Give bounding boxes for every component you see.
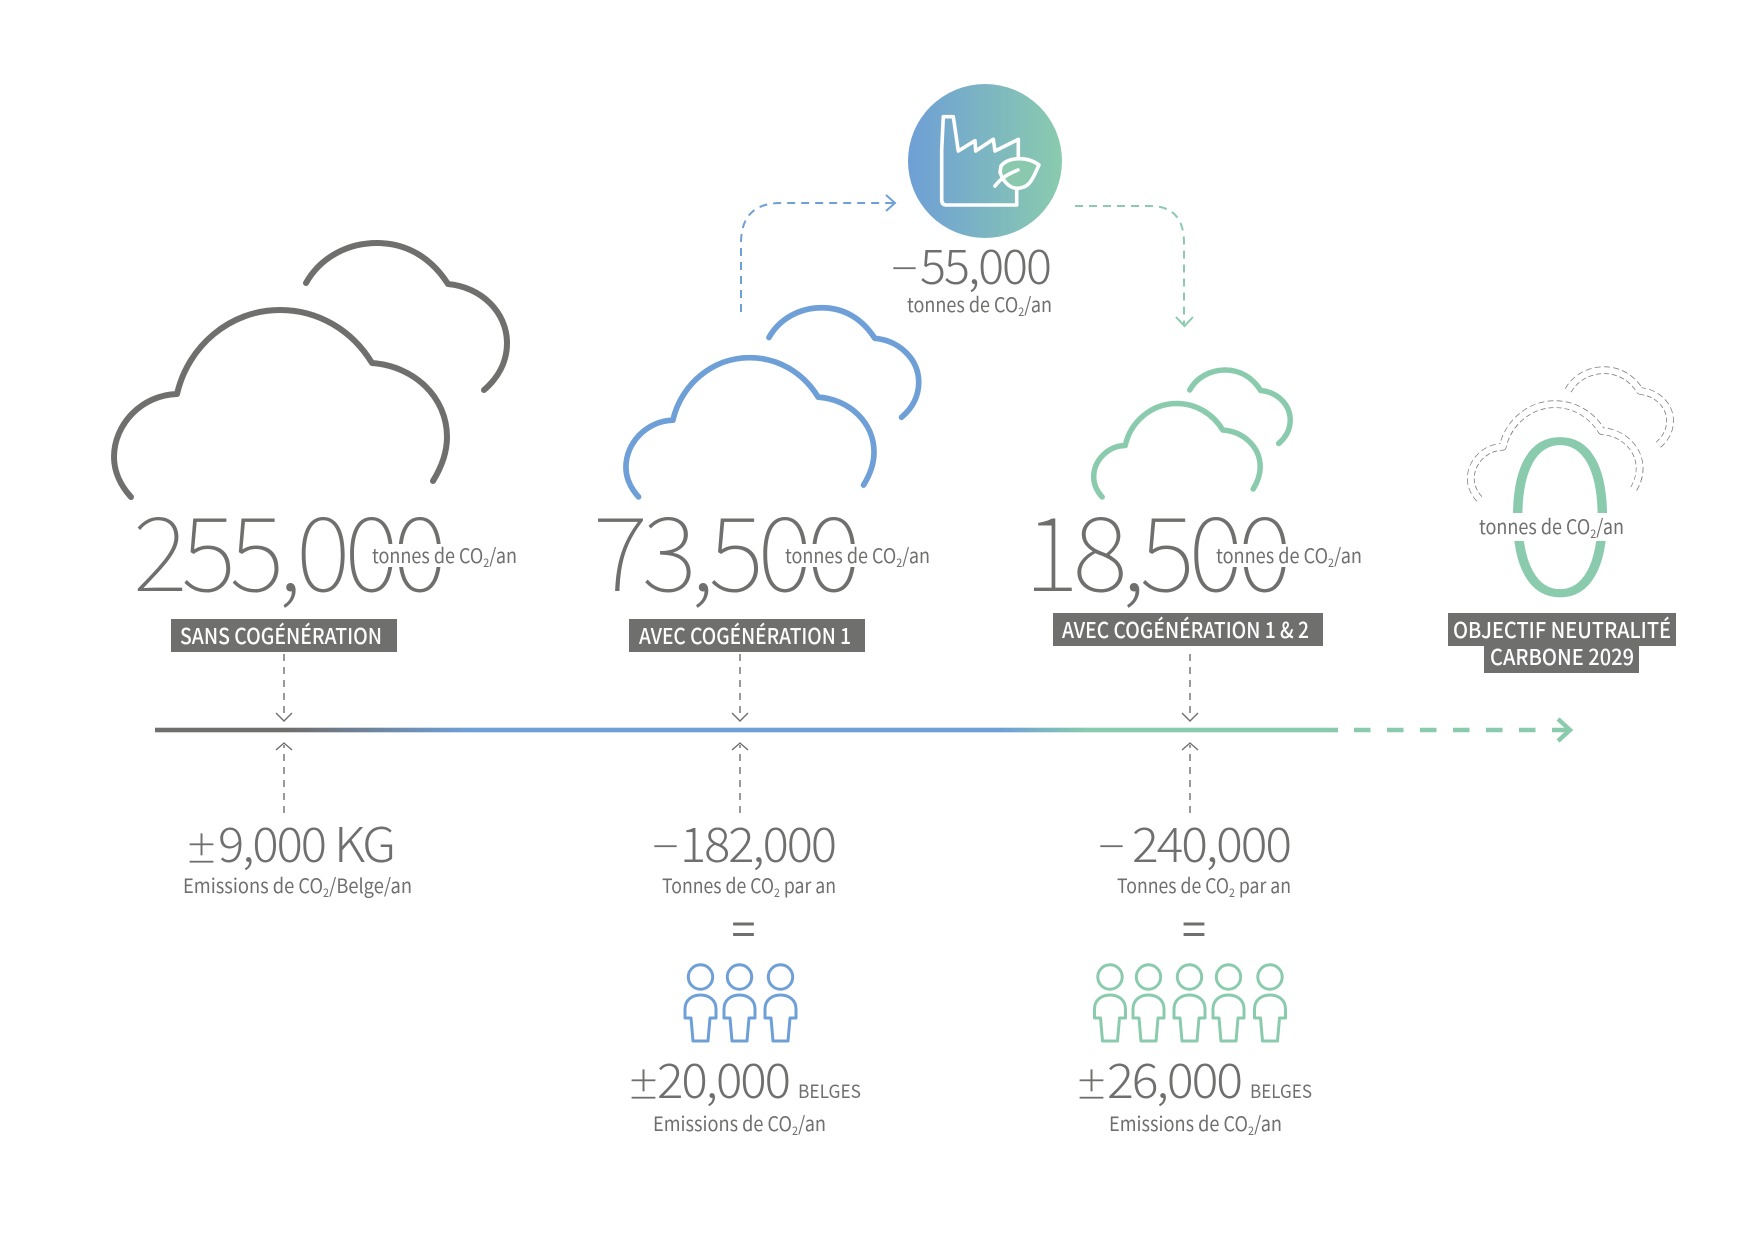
unit knock-out background bbox=[783, 544, 863, 567]
label: sans cogénération: SANS COGÉNÉRATION bbox=[180, 619, 382, 651]
value unit: KG bbox=[334, 806, 394, 876]
panel: sans cogénération bbox=[114, 243, 517, 652]
label: objectif neutralité carbone 2029: OBJECTIF NEUTRALITÉ bbox=[1453, 613, 1671, 645]
unit: tonnes de CO2/an: /an bbox=[902, 540, 930, 569]
unit: tonnes de CO2/an: 2 bbox=[1590, 525, 1597, 542]
equals: = bbox=[1182, 905, 1206, 952]
panel: avec cogénération 1 bbox=[593, 308, 930, 652]
label: avec cogénération 1: AVEC COGÉNÉRATION 1 bbox=[639, 619, 851, 651]
stat: -240,000 bbox=[1077, 806, 1312, 1139]
caption: 2 bbox=[1229, 884, 1235, 901]
unit: tonnes de CO2/an: /an bbox=[489, 540, 517, 569]
value minus: − bbox=[651, 818, 680, 876]
caption: Emissions de CO bbox=[1109, 1108, 1262, 1137]
unit: tonnes de CO2/an: /an bbox=[1596, 511, 1624, 540]
caption: 2 bbox=[1248, 1122, 1254, 1139]
value digits: 182,000 bbox=[680, 806, 835, 876]
caption: /Belge/an bbox=[329, 870, 412, 899]
timeline bbox=[155, 719, 1570, 741]
value minus: − bbox=[1097, 818, 1126, 876]
unit knock-out background bbox=[1476, 513, 1626, 541]
panel: avec cogénération 1 et 2 bbox=[1024, 370, 1362, 646]
caption: par an bbox=[780, 870, 836, 899]
caption: Tonnes de CO bbox=[662, 870, 789, 899]
label: objectif neutralité carbone 2029: CARBONE 2029 bbox=[1490, 640, 1634, 672]
label: avec cogénération 1 & 2: AVEC COGÉNÉRATION 1 & 2 bbox=[1062, 613, 1309, 645]
value: ± sign: ± bbox=[187, 818, 216, 876]
equals: = bbox=[731, 905, 756, 952]
value digits: 9,000 bbox=[218, 806, 325, 876]
caption: /an bbox=[798, 1108, 826, 1137]
stat: -182,000 bbox=[629, 806, 861, 1139]
caption: Emissions de CO bbox=[653, 1108, 806, 1137]
unit: tonnes de CO2/an: tonnes de CO bbox=[1216, 540, 1340, 569]
icon: gray clouds bbox=[114, 243, 507, 497]
caption: 2 bbox=[774, 884, 780, 901]
unit: tonnes de CO2/an: /an bbox=[1334, 540, 1362, 569]
icon: blue clouds bbox=[626, 308, 919, 497]
value: 73,500: 73,500 bbox=[593, 472, 855, 621]
timeline dashed arrow bbox=[1354, 719, 1570, 741]
value digits: 240,000 bbox=[1132, 806, 1290, 876]
caption: 2 bbox=[323, 884, 329, 901]
belges: BELGES bbox=[798, 1078, 861, 1104]
label: objectif neutralité carbone 2029 bbox=[1448, 613, 1676, 673]
caption: Emissions de CO bbox=[183, 870, 336, 899]
icon: factory circle bbox=[908, 84, 1062, 238]
caption: Tonnes de CO bbox=[1117, 870, 1244, 899]
unit: tonnes de CO2/an: 2 bbox=[483, 554, 490, 571]
belges: BELGES bbox=[1250, 1078, 1312, 1104]
unit: tonnes de CO2/an: tonnes de CO bbox=[1479, 511, 1603, 540]
panel: objectif neutralité bbox=[1448, 341, 1676, 673]
value: 0: 0 bbox=[1501, 341, 1619, 657]
value: 55,000: 55,000 bbox=[920, 228, 1050, 298]
unit: tonnes de CO2/an: tonnes de CO bbox=[907, 289, 1031, 318]
value digits: 20,000 bbox=[657, 1042, 789, 1112]
unit: tonnes de CO2/an: tonnes de CO bbox=[785, 540, 909, 569]
unit: tonnes de CO2/an: 2 bbox=[896, 554, 903, 571]
icon: dashed clouds bbox=[1471, 370, 1670, 499]
caption: par an bbox=[1235, 870, 1291, 899]
icon: 5 green people bbox=[1094, 965, 1286, 1041]
unit: tonnes de CO2/an: /an bbox=[1024, 289, 1052, 318]
icon: green clouds bbox=[1094, 370, 1290, 497]
unit knock-out background bbox=[370, 544, 448, 567]
unit: tonnes de CO2/an: tonnes de CO bbox=[372, 540, 496, 569]
arrows to timeline bbox=[276, 654, 1198, 813]
caption: /an bbox=[1254, 1108, 1282, 1137]
arrow: green dashed bbox=[1075, 206, 1193, 326]
value digits: 26,000 bbox=[1107, 1042, 1241, 1112]
arrow: blue dashed bbox=[741, 195, 895, 312]
unit knock-out background bbox=[1214, 544, 1294, 567]
unit: tonnes de CO2/an: 2 bbox=[1328, 554, 1334, 571]
icon: 3 blue people bbox=[685, 965, 796, 1041]
unit: tonnes de CO2/an: 2 bbox=[1018, 303, 1025, 320]
timeline solid line bbox=[155, 728, 1338, 732]
value: 255,000: 255,000 bbox=[133, 472, 441, 621]
panel: cogénération 2 factory bbox=[741, 84, 1193, 326]
value: ± sign: ± bbox=[629, 1054, 658, 1112]
value: 18,500: 18,500 bbox=[1024, 472, 1286, 621]
value: minus sign: − bbox=[890, 240, 919, 298]
caption: 2 bbox=[792, 1122, 798, 1139]
value: ± sign: ± bbox=[1077, 1054, 1106, 1112]
stat: 9,000 kg bbox=[183, 806, 412, 901]
